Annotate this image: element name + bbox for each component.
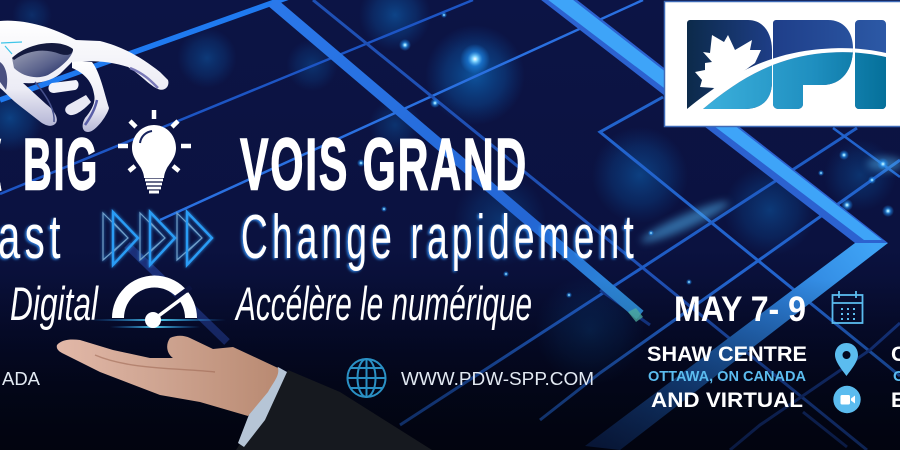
icon: speedometer — [90, 276, 226, 328]
date: MAY 7- 9 — [674, 290, 806, 329]
small fingers — [48, 80, 79, 93]
human hand with suit sleeve — [57, 336, 432, 450]
hand body with index finger and thumb — [0, 21, 168, 126]
wrist joint — [0, 62, 7, 90]
subheading english: ast — [0, 203, 65, 272]
subheading french: Change rapidement — [241, 203, 638, 272]
icon: map pin — [835, 343, 858, 376]
website: WWW.PDW-SPP.COM — [401, 368, 594, 389]
headline english: BIG — [23, 124, 99, 206]
left info text: ADA — [2, 368, 41, 389]
venue english: SHAW CENTRE — [647, 342, 807, 366]
tagline english: Digital — [10, 277, 99, 330]
logo panel — [664, 2, 900, 126]
robot hand — [0, 21, 168, 132]
venue english: AND VIRTUAL — [651, 388, 803, 412]
logo: DPI letters — [687, 20, 886, 109]
venue french — [891, 342, 900, 412]
icon: light bulb — [118, 110, 191, 192]
icon: maple leaf — [695, 35, 761, 89]
shirt cuff — [238, 367, 287, 447]
hand — [57, 336, 278, 416]
suit sleeve — [236, 370, 432, 450]
tagline french: Accélère le numérique — [234, 277, 532, 330]
icon: video camera — [833, 386, 861, 413]
venue english: OTTAWA, ON CANADA — [648, 368, 806, 385]
icon: calendar — [832, 291, 863, 323]
venue english — [647, 342, 807, 412]
icon: fast-forward arrows — [103, 212, 212, 265]
icon: globe — [348, 359, 386, 397]
palm — [12, 44, 73, 77]
headline french: VOIS GRAND — [240, 124, 528, 206]
middle finger — [72, 60, 109, 132]
headline english — [0, 124, 99, 206]
